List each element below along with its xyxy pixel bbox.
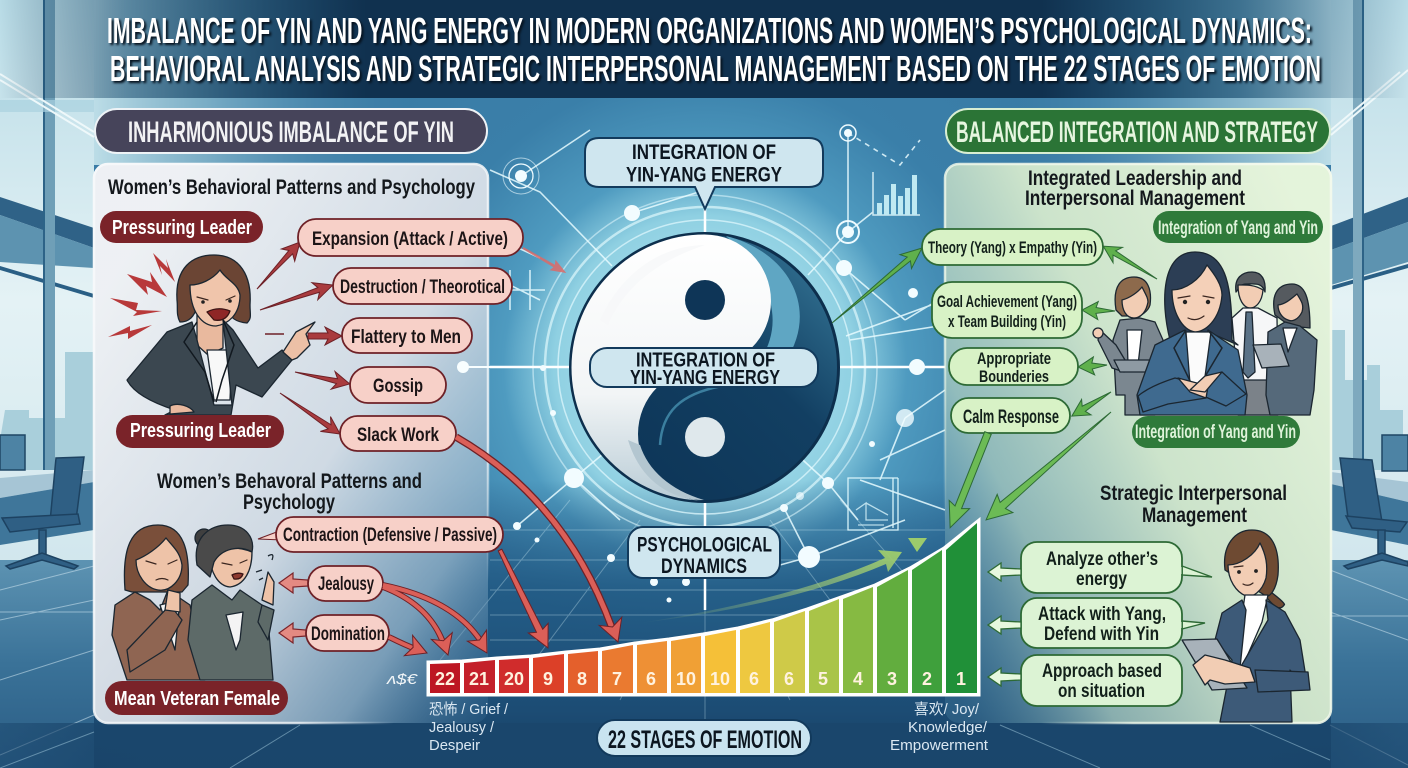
figure: lead woman [1137,252,1247,415]
bar numbers: 6 [646,669,656,689]
label: positive emotions: Empowerment [890,737,989,754]
tag: calm response [951,398,1070,433]
badge: integration of yang and yin bottom: Integration of Yang and Yin [1135,422,1296,443]
label: integration on symbol: YIN-YANG ENERGY [630,367,781,389]
icon: small chart frame [848,478,898,530]
label: positive emotions: 喜欢/ Joy/ [914,701,980,718]
label: negative emotions: Jealousy / [429,719,495,736]
tag: theory and empathy: Theory (Yang) x Empathy (Yin) [928,238,1097,257]
title [0,0,1408,98]
arrows: leader to tags [1067,238,1162,424]
heading: women's patterns: Women’s Behavioral Patterns and Psychology [108,176,475,199]
tag: slack work: Slack Work [357,425,439,446]
tag: jealousy [308,566,383,601]
bar numbers: 2 [922,669,932,689]
tag: boundaries: Bounderies [979,367,1049,386]
tag: domination: Domination [311,624,385,645]
tag: destruction: Destruction / Theorotical [340,277,505,298]
heading: integrated leadership [1025,167,1245,210]
heading: integrated leadership: Integrated Leadership and [1028,167,1242,190]
figure: colleague woman with tablet [1253,284,1317,415]
bar numbers [435,669,966,689]
bar numbers: 8 [577,669,587,689]
arrow: expansion spillover [520,243,569,278]
bar numbers: 4 [853,669,863,689]
arrows: callouts to chart [988,563,1021,686]
callout: psychological dynamics: PSYCHOLOGICAL [637,534,772,556]
heading: integrated leadership: Interpersonal Management [1025,187,1245,210]
icon: mini bar chart [873,172,920,215]
bar numbers: 22 [435,669,455,689]
tag: theory and empathy [922,229,1103,265]
label: negative emotions: Despeir [429,737,480,754]
bar numbers: 6 [749,669,759,689]
arrow: slack work to chart [456,437,629,646]
bar numbers: 9 [543,669,553,689]
icon: down triangle marker [908,538,927,552]
callout: approach: on situation [1058,681,1145,702]
arrow: center to theory [826,241,928,330]
label: positive emotions: Knowledge/ [908,719,988,736]
panel: left imbalance [94,164,523,723]
heading: strategic management [1100,482,1287,527]
tag: calm response: Calm Response [963,407,1059,428]
bar numbers: 1 [956,669,966,689]
arrow: contraction to chart [490,545,558,653]
callout: attack and defend: Defend with Yin [1044,624,1159,645]
callout: approach: Approach based [1042,661,1162,682]
figure: pressuring leader [127,255,315,415]
tag: destruction [333,268,512,304]
badge: pressuring leader bottom: Pressuring Leader [130,420,271,442]
figure: strategist woman [1182,530,1310,722]
tag: expansion [298,219,523,256]
tag: goal and team: Goal Achievement (Yang) [937,292,1077,311]
callout: psychological dynamics [628,527,780,578]
heading: strategic management: Strategic Interpersonal [1100,482,1287,505]
left section header [95,109,487,153]
figure: colleague woman [1093,277,1163,415]
tag: flattery: Flattery to Men [351,327,461,348]
label: integration on symbol: INTEGRATION OF [636,350,775,372]
tag: boundaries: Appropriate [977,349,1051,368]
callout: integration of yin-yang energy: INTEGRATION OF [632,141,776,164]
heading: women's patterns second: Psychology [243,491,335,514]
badge: integration of yang and yin top: Integration of Yang and Yin [1158,218,1318,239]
figure: veteran woman right [188,525,274,680]
callout: attack and defend: Attack with Yang, [1038,604,1166,625]
tag: boundaries [949,348,1078,386]
callout: integration of yin-yang energy [585,138,823,209]
tag: domination [306,615,389,651]
icon: anger lightning bolts [108,253,175,339]
heading: women's patterns second: Women’s Behavoral Patterns and [157,470,422,493]
tag: flattery [342,318,472,353]
tag: goal and team [932,282,1082,338]
tag: expansion: Expansion (Attack / Active) [312,229,508,250]
label: 22 stages of emotion: 22 STAGES OF EMOTION [608,726,802,754]
lower dot [685,417,725,457]
tag: goal and team: x Team Building (Yin) [948,312,1066,331]
network and grid backdrop [440,130,980,720]
arrows: left pointing to women [279,573,308,643]
callout: approach [1021,655,1182,706]
left section header: INHARMONIOUS IMBALANCE OF YIN [128,116,454,149]
bar cells [430,523,977,693]
label: negative emotions: 恐怖 / Grief / [429,701,509,718]
right office chair [1340,458,1408,569]
bar numbers: 21 [469,669,489,689]
tag: gossip: Gossip [373,376,423,397]
badge: mean veteran female: Mean Veteran Female [114,688,280,710]
arrows: jealousy and domination to chart [383,585,497,663]
yin-yang symbol [570,234,838,502]
bar numbers: 10 [710,669,730,689]
arrow: rising trend [640,550,902,623]
heading: strategic management: Management [1142,504,1247,527]
figure: colleague man [1232,272,1278,415]
right section header [946,109,1330,153]
upper dot [685,280,725,320]
arrow: team to chart [978,403,1119,529]
badge: mean veteran female [105,681,288,715]
bar numbers: 3 [887,669,897,689]
bar numbers: 7 [612,669,622,689]
glyph mark beside chart: ʌ$€ [386,671,418,688]
callout: analyze [1021,542,1212,593]
badge: pressuring leader top [100,211,263,243]
callout: analyze: Analyze other’s [1046,549,1158,570]
bar numbers: 20 [504,669,524,689]
tag: contraction: Contraction (Defensive / Passive) [283,525,497,546]
badge: pressuring leader top: Pressuring Leader [112,217,252,239]
tag: jealousy: Jealousy [318,574,374,595]
badge: integration of yang and yin top [1153,211,1323,243]
figure: veteran woman left [112,525,205,680]
network nodes [503,125,925,602]
arrows: leader behaviors [250,236,352,441]
callout: analyze: energy [1076,569,1127,590]
label: positive emotions [890,701,989,754]
arrow: calm response to chart [940,429,998,532]
tag: contraction [258,517,503,552]
badge: pressuring leader bottom [116,415,284,448]
label: integration on symbol [590,348,818,389]
badge: integration of yang and yin bottom [1132,416,1300,448]
callout: attack and defend [1021,598,1205,648]
tag: slack work [340,416,456,451]
chart: 22 stages of emotion [428,520,979,695]
left office chair [2,457,84,569]
heading: women's patterns second [157,470,422,514]
label: 22 stages of emotion [597,720,811,756]
panel: right integration [922,164,1331,723]
bar numbers: 10 [676,669,696,689]
callout: integration of yin-yang energy: YIN-YANG ENERGY [626,164,782,186]
bar numbers: 6 [784,669,794,689]
tag: gossip [350,367,446,403]
callout: psychological dynamics: DYNAMICS [661,555,747,578]
network node behind gossip [457,361,490,373]
bar numbers: 5 [818,669,828,689]
label: negative emotions [429,701,509,754]
